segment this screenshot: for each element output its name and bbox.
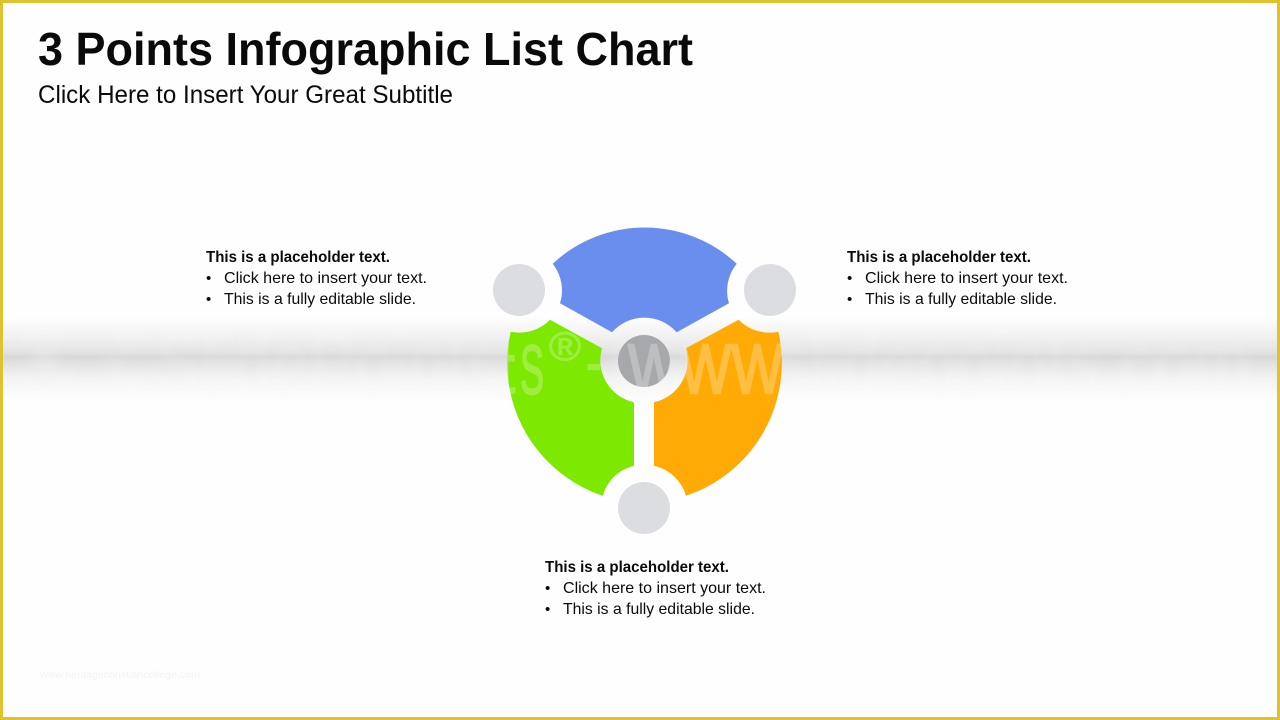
text block: right: This is a placeholder text. <box>847 249 1031 266</box>
text block: bottom: • <box>545 580 550 597</box>
text block: left: Click here to insert your text. <box>224 270 427 287</box>
watermark text over chart <box>507 332 782 396</box>
text block: bottom: Click here to insert your text. <box>563 580 766 597</box>
node: bottom <box>618 482 670 534</box>
watermark text over chart: S <box>520 331 544 409</box>
text block: bottom: This is a placeholder text. <box>545 559 729 576</box>
text block: left: This is a placeholder text. <box>206 249 390 266</box>
text block: bottom <box>545 559 766 618</box>
text block: right: This is a fully editable slide. <box>865 291 1057 308</box>
segment: blue top <box>553 227 737 332</box>
watermark text over chart: t <box>497 330 515 408</box>
text block: left: This is a fully editable slide. <box>224 291 416 308</box>
node: right <box>744 264 796 316</box>
text block: right: Click here to insert your text. <box>865 270 1068 287</box>
watermark text over chart: - <box>586 329 602 396</box>
text block: bottom: This is a fully editable slide. <box>563 601 755 618</box>
subtitle: Click Here to Insert Your Great Subtitle <box>38 81 453 109</box>
text block: right: • <box>847 291 852 308</box>
text block: right <box>847 249 1068 308</box>
node: left <box>493 264 545 316</box>
footer watermark url: www.heritagechristiancollege.com <box>39 670 200 681</box>
text block: bottom: • <box>545 601 550 618</box>
text block: left: • <box>206 270 211 287</box>
center hub <box>618 335 670 387</box>
watermark text over chart: ® <box>549 325 581 369</box>
text block: left: • <box>206 291 211 308</box>
title: 3 Points Infographic List Chart <box>38 23 693 75</box>
segment: green left <box>507 320 634 496</box>
text block: left <box>206 249 427 308</box>
watermark text over chart: WWW <box>628 330 783 408</box>
text block: right: • <box>847 270 852 287</box>
chart: three-segment circle <box>493 227 796 534</box>
segment: orange right <box>654 320 782 496</box>
